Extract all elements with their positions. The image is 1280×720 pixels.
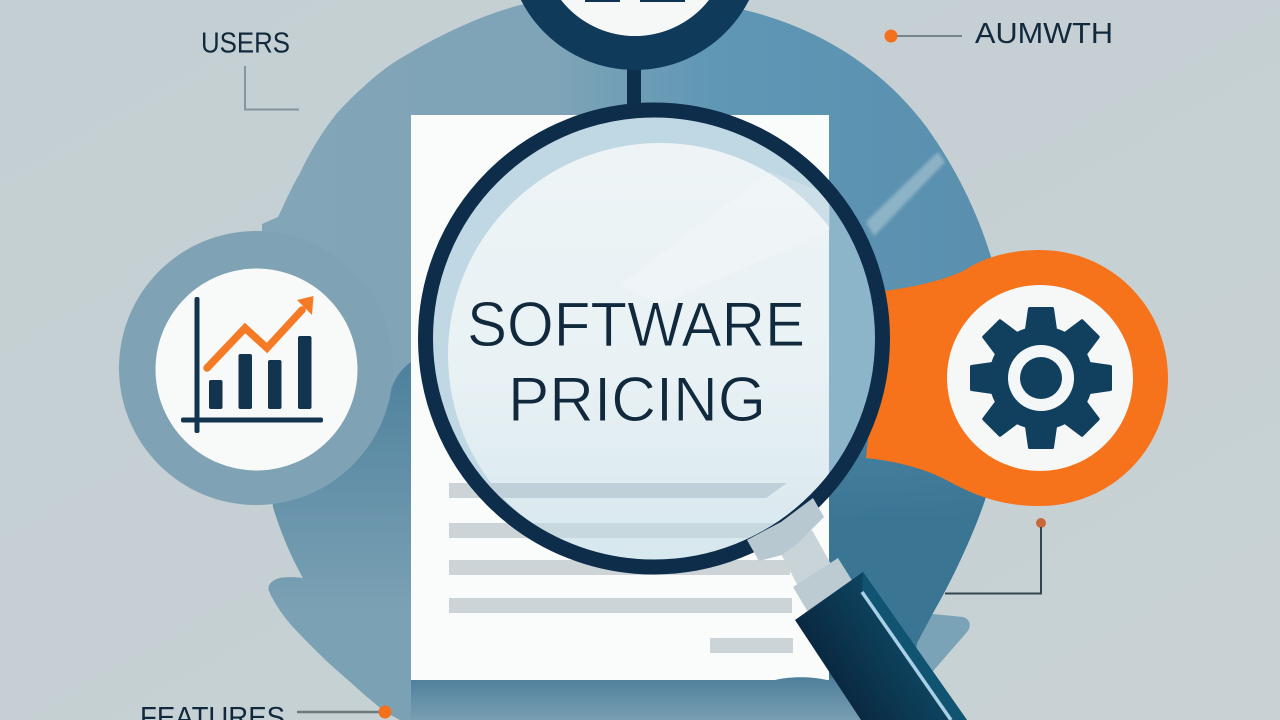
label: aumwth (884, 18, 1113, 50)
icon: gear (972, 308, 1110, 448)
light streak (866, 152, 945, 236)
handle highlight (862, 592, 951, 720)
handle side facet (862, 572, 967, 720)
title: PRICING (508, 365, 766, 435)
handle neck (778, 530, 832, 590)
handle grip (795, 572, 967, 720)
magnifier handle (747, 498, 967, 720)
label: users (201, 28, 299, 110)
right bubble: settings (866, 250, 1168, 506)
handle nut (793, 558, 853, 612)
title (467, 290, 805, 435)
white disc (156, 268, 358, 470)
label: aumwth: AUMWTH (975, 18, 1113, 50)
right tail of backdrop (900, 614, 970, 690)
left bubble: users (119, 231, 393, 505)
document text lines (449, 483, 793, 653)
handle collar (747, 498, 824, 561)
label: features (140, 702, 392, 720)
top bubble: cropped icon (507, 0, 763, 108)
white disc (947, 285, 1133, 471)
magnifying lens (420, 105, 890, 575)
callout connector (945, 518, 1046, 594)
title: SOFTWARE (467, 290, 805, 360)
blob under page (775, 677, 870, 720)
icon: growth bar chart (181, 296, 323, 433)
document page (411, 115, 829, 680)
backdrop blob (250, 0, 1020, 720)
lens ring (426, 110, 882, 567)
label: users: USERS (201, 28, 290, 60)
